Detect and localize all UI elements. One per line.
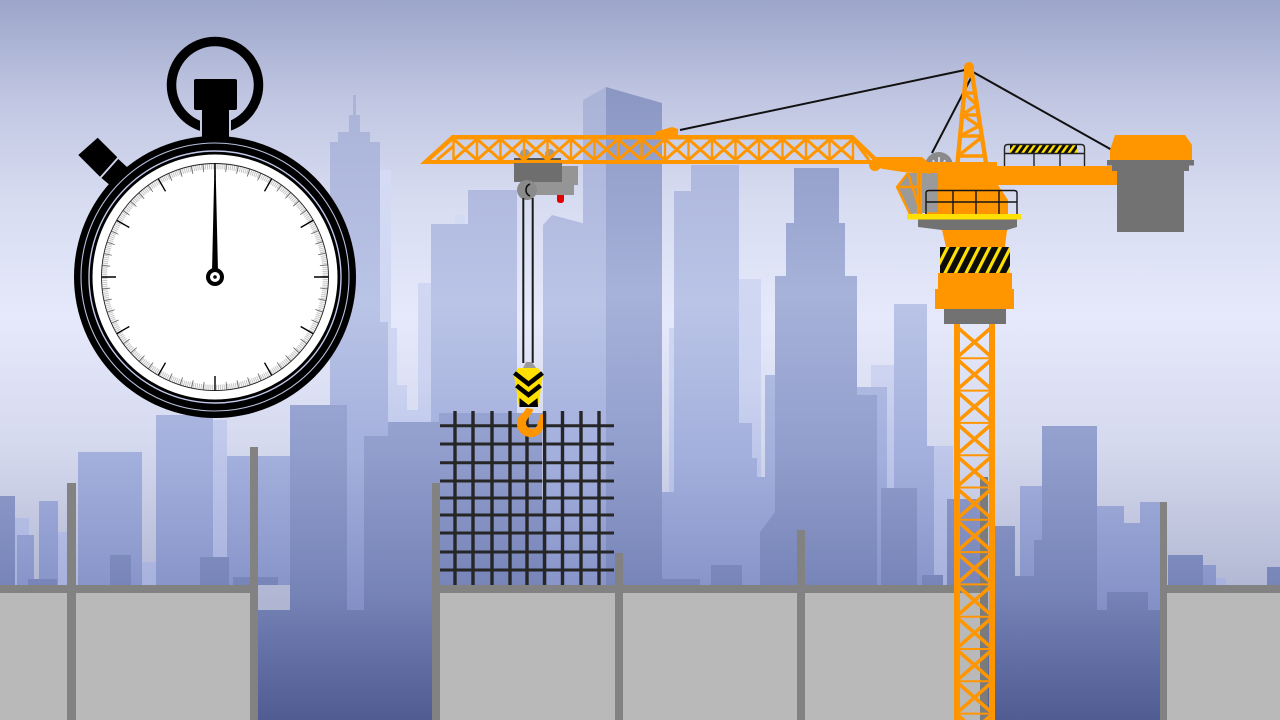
trolley wheels (514, 149, 561, 164)
counter jib and cab (869, 157, 1117, 214)
stopwatch side pusher (78, 138, 128, 186)
icon: stopwatch (74, 42, 356, 418)
yellow platform and grey base (907, 214, 1021, 230)
crane mast head frame (958, 62, 986, 163)
stopwatch dial (102, 164, 328, 390)
skyline: far buildings (15, 170, 1226, 585)
icon: crane hook (517, 408, 543, 437)
operator platform railing (926, 190, 1017, 214)
slewing ring housing (935, 230, 1014, 324)
crane (420, 62, 1194, 720)
rebar grid (440, 411, 614, 585)
crane cables (680, 70, 1112, 153)
crane jib truss (420, 127, 877, 164)
hoist ropes (523, 198, 533, 363)
rear railing with hazard strip (1004, 144, 1084, 166)
crane mast (954, 322, 995, 720)
counterweight (1107, 135, 1194, 232)
concrete walls with posts (0, 447, 1280, 720)
slewing gear (925, 152, 953, 180)
icon: crane hook block (514, 362, 543, 407)
stopwatch case rings (74, 136, 356, 418)
stopwatch crown ring and stem (172, 42, 258, 140)
stopwatch hand and hub (206, 163, 224, 286)
skyline: middle buildings (17, 87, 1216, 610)
trolley (514, 163, 578, 203)
